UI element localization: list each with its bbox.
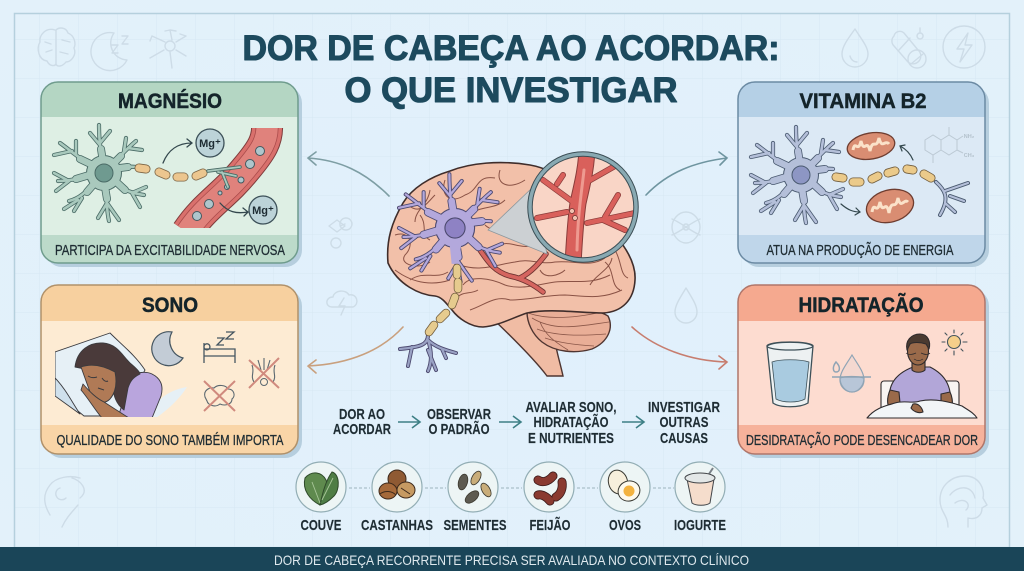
- icon: sun: [942, 330, 967, 355]
- arrow: to hidratação: [632, 327, 727, 369]
- icon: seeds: [457, 470, 493, 506]
- central brain illustration: [388, 150, 636, 376]
- caption: magnésio: PARTICIPA DA EXCITABILIDADE NERVOSA: [55, 242, 285, 259]
- axon: brain: [400, 268, 458, 371]
- step 4: INVESTIGAR: [648, 399, 720, 416]
- food labels: OVOS: [609, 517, 641, 534]
- icon: crossed brain: [204, 381, 235, 411]
- step 2: O PADRÃO: [428, 420, 490, 438]
- arrow 2: [499, 416, 521, 428]
- caption: sono: QUALIDADE DO SONO TAMBÉM IMPORTA: [56, 432, 284, 449]
- neuron: brain: [399, 174, 502, 282]
- step 3: AVALIAR SONO,: [526, 399, 616, 416]
- food labels: IOGURTE: [674, 517, 726, 534]
- neuron: vitamina b2: [751, 127, 843, 223]
- mitochondrion upper: [845, 129, 897, 163]
- brain artery: [480, 250, 546, 292]
- illustration: man in bed: [867, 334, 977, 418]
- heading: hidratação: HIDRATAÇÃO: [798, 294, 924, 317]
- food labels: [300, 516, 726, 534]
- food labels: CASTANHAS: [361, 517, 433, 534]
- footer bar: [0, 547, 1024, 571]
- axon: magnésio: [139, 167, 240, 187]
- mitochondrion lower: [863, 184, 917, 228]
- neuron: magnésio: [54, 125, 146, 221]
- arrow: to vitamina b2: [646, 152, 727, 195]
- icon: beans: [538, 476, 562, 501]
- food labels: FEIJÃO: [530, 516, 571, 534]
- chemical structure: [925, 127, 975, 163]
- step 3: [526, 399, 616, 447]
- magnifier lens: [530, 150, 636, 265]
- icon: yogurt: [685, 468, 715, 505]
- footer bar: DOR DE CABEÇA RECORRENTE PRECISA SER AVALIADA NO CONTEXTO CLÍNICO: [274, 552, 749, 568]
- step 1: [333, 406, 391, 438]
- food row: [296, 462, 726, 534]
- step 4: [648, 399, 720, 447]
- arrow 3: [622, 416, 644, 428]
- step 2: OBSERVAR: [427, 406, 491, 423]
- icon: kale: [304, 472, 338, 505]
- panel: magnésio: [41, 82, 302, 267]
- food labels: COUVE: [300, 517, 342, 534]
- illustration: sleeping woman: [55, 333, 187, 418]
- heading: magnésio: MAGNÉSIO: [118, 90, 222, 113]
- brainstem: [492, 305, 563, 376]
- gyri: [395, 170, 628, 310]
- step 1: ACORDAR: [333, 421, 391, 438]
- ions: mg: Mg⁺: [252, 205, 274, 217]
- panel: vitamina b2: [738, 82, 989, 267]
- ions: mg: Mg⁺: [199, 138, 221, 150]
- icon: crossed nerves: [249, 358, 279, 388]
- icon: eggs: [606, 468, 643, 504]
- chemical structure: NH₂: [964, 134, 975, 140]
- icon: moon: [152, 332, 183, 366]
- cerebellum: [527, 307, 610, 352]
- title: DOR DE CABEÇA AO ACORDAR:: [242, 29, 780, 68]
- axon: vitamina b2: [836, 169, 968, 215]
- heading: vitamina b2: VITAMINA B2: [800, 90, 926, 113]
- icon: bed: [204, 332, 235, 363]
- icon: nuts: [379, 470, 415, 499]
- panel: sono: [41, 285, 302, 458]
- panel: hidratação: [738, 285, 989, 458]
- step 3: HIDRATAÇÃO: [534, 413, 609, 431]
- step 1: DOR AO: [339, 406, 385, 423]
- arrow 1: [398, 416, 420, 428]
- step 4: CAUSAS: [660, 430, 708, 447]
- step 2: [427, 406, 491, 438]
- flow: steps: [333, 399, 720, 447]
- food labels: SEMENTES: [444, 517, 506, 534]
- title: O QUE INVESTIGAR: [344, 71, 678, 110]
- caption: vitamina b2: ATUA NA PRODUÇÃO DE ENERGIA: [766, 242, 954, 259]
- ions: mg: [196, 129, 277, 224]
- arrow: to sono: [308, 327, 403, 373]
- step 3: E NUTRIENTES: [528, 430, 614, 447]
- arrows: vitamina b2: [841, 145, 913, 215]
- blood vessel: [187, 124, 267, 232]
- cerebrum: [388, 163, 635, 327]
- heading: sono: SONO: [142, 294, 198, 317]
- icon: droplets: [832, 355, 871, 392]
- step 4: OUTRAS: [660, 414, 708, 431]
- magnifier cone: [488, 187, 547, 254]
- arrows: magnésio: [163, 139, 248, 216]
- chemical structure: CH₃: [964, 153, 975, 159]
- title: [242, 29, 780, 110]
- icon: glass of water: [767, 342, 813, 407]
- arrow: to magnésio: [308, 152, 389, 196]
